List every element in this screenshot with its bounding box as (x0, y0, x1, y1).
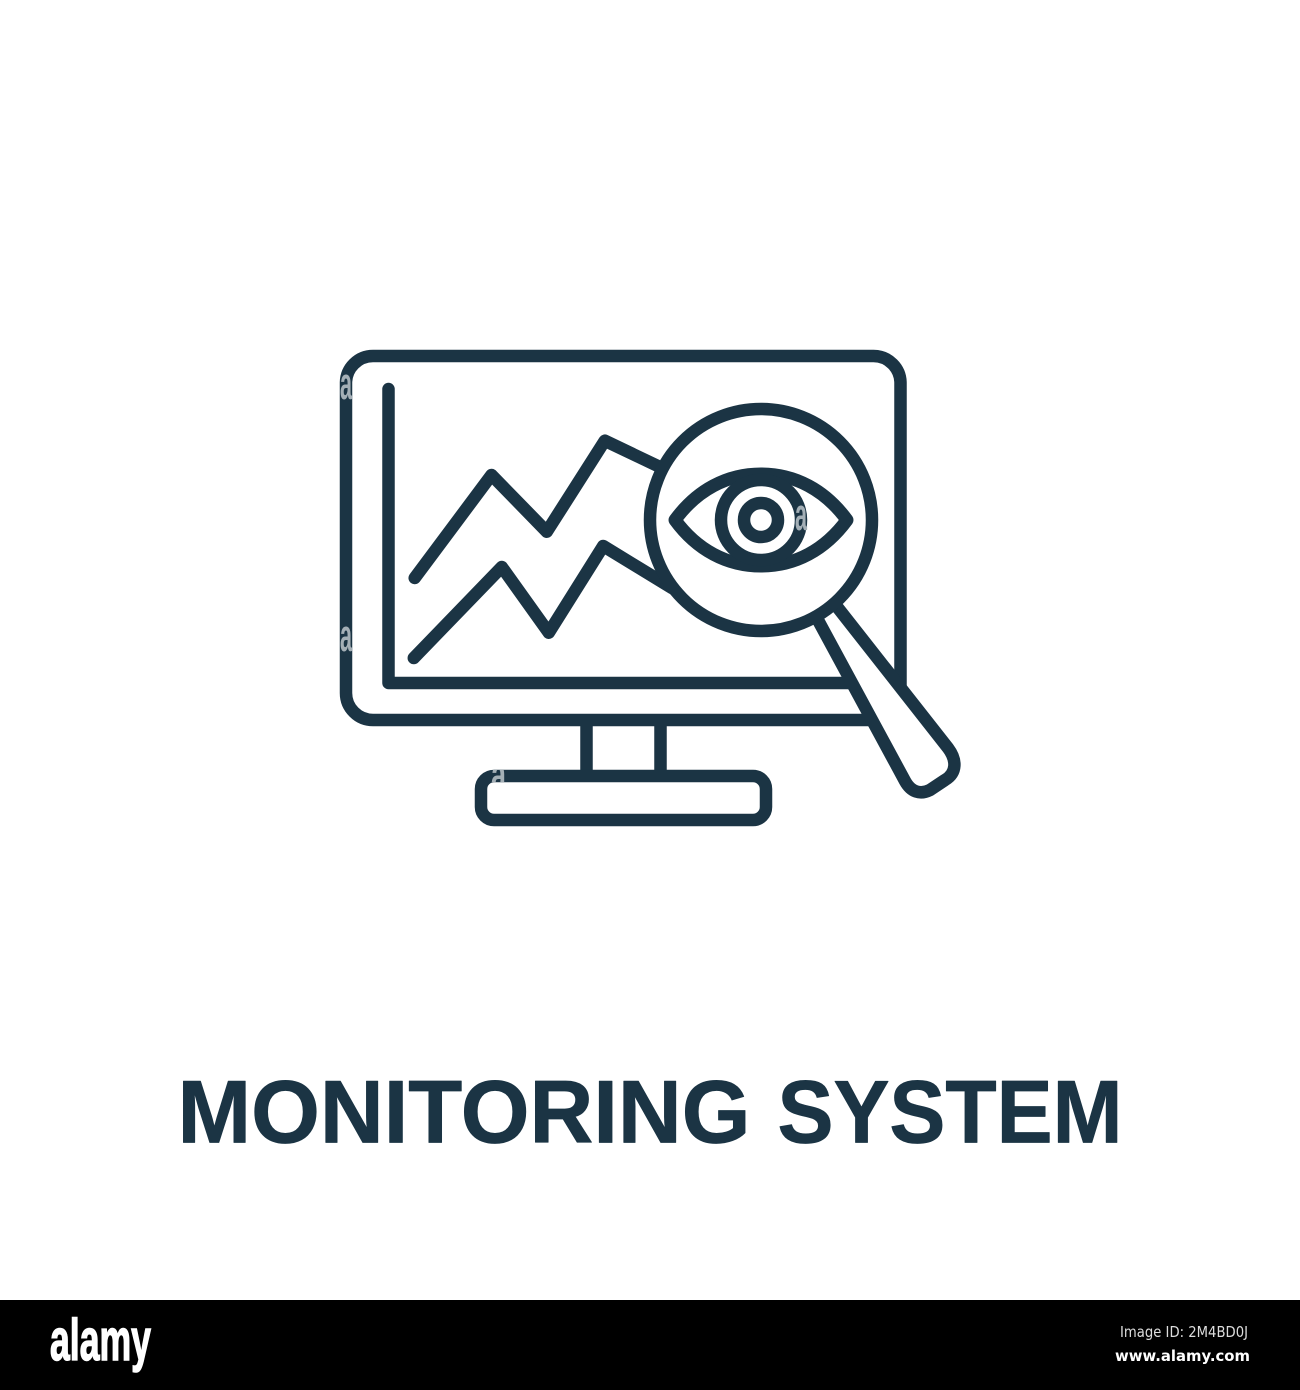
chart axes (388, 389, 855, 683)
watermark marks: a (491, 749, 507, 800)
title: MONITORING (178, 1062, 750, 1162)
image id: Image ID: 2M4BD0J (1120, 1323, 1248, 1341)
title (178, 1062, 1122, 1162)
icon: monitor base (481, 776, 766, 820)
chart line: upper (415, 441, 662, 578)
icon: monitor screen (346, 356, 900, 720)
icon: iris (721, 480, 801, 560)
icon: eye outline (675, 474, 847, 566)
icon: monitor stand (586, 726, 660, 772)
watermark marks: a (340, 610, 352, 661)
chart line: lower (414, 546, 672, 658)
icon: magnifier handle (819, 608, 954, 792)
watermark marks: a (340, 358, 352, 409)
footer logo: alamy (50, 1308, 151, 1373)
footer bar (0, 1300, 1300, 1390)
watermark marks (340, 358, 807, 800)
icon: pupil (744, 503, 778, 537)
title: SYSTEM (778, 1062, 1122, 1162)
text: a (795, 489, 807, 540)
icon: monitoring system (346, 356, 954, 820)
website: www.alamy.com (1115, 1347, 1250, 1365)
icon: magnifier lens (650, 409, 872, 631)
